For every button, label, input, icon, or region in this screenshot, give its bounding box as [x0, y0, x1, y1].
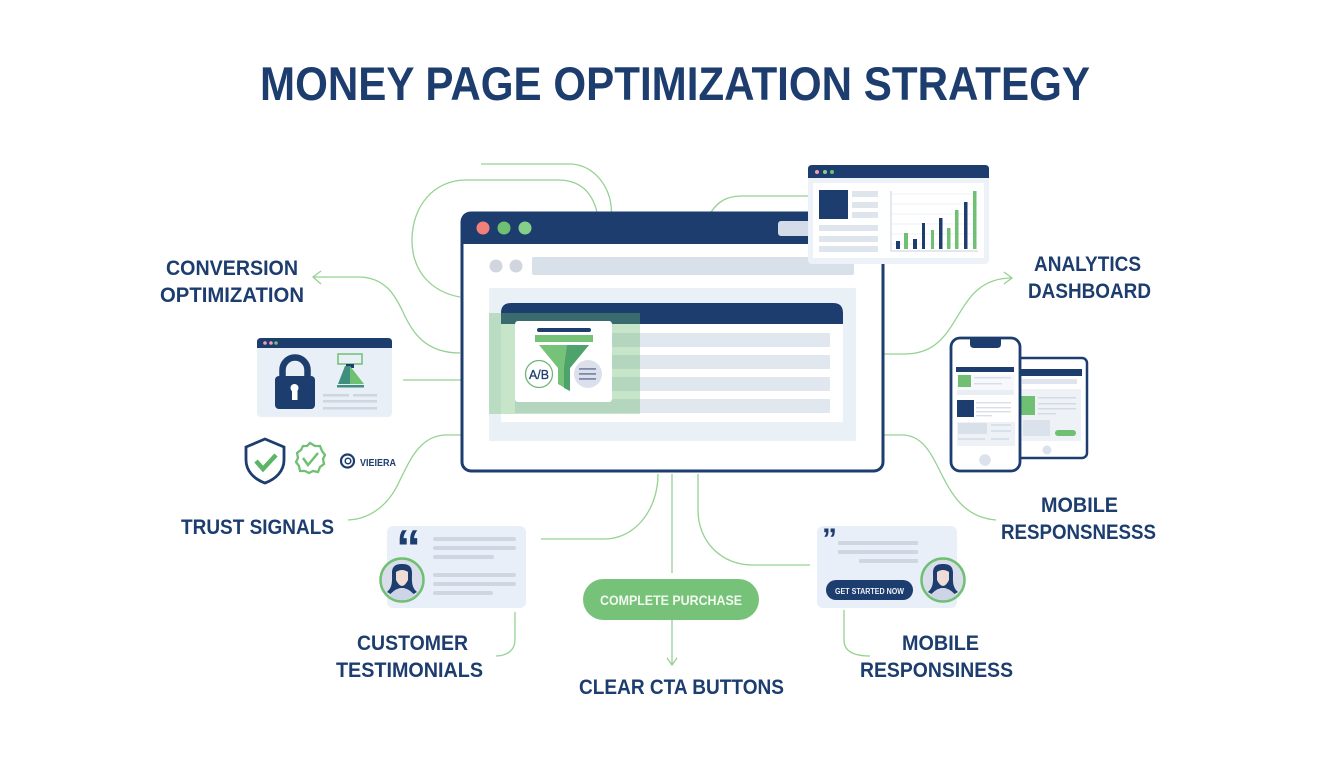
label: analytics dashboard: DASHBOARD — [1028, 280, 1151, 303]
security card — [257, 338, 392, 417]
label: customer testimonials: TESTIMONIALS — [336, 659, 483, 682]
get started card — [817, 523, 964, 608]
icon: shield check — [246, 439, 284, 483]
avatar — [922, 558, 964, 602]
connector lines — [313, 164, 1012, 665]
label: conversion optimization — [160, 257, 304, 307]
window dots — [476, 222, 532, 234]
get started button: GET STARTED NOW — [835, 587, 904, 596]
logo: Vieiera: VIEIERA — [360, 458, 396, 469]
testimonial card — [380, 520, 526, 608]
text lines — [838, 541, 918, 563]
title: MONEY PAGE OPTIMIZATION STRATEGY — [260, 57, 1090, 110]
A/B badge: A/B — [529, 367, 549, 382]
funnel card — [515, 321, 612, 402]
text lines — [433, 537, 516, 595]
icon: funnel pedestal — [337, 354, 364, 388]
quote mark: ” — [822, 523, 837, 556]
label: mobile responsiveness right: RESPONSNESSS — [1001, 521, 1156, 544]
funnel icon — [535, 328, 593, 391]
inner page — [501, 303, 843, 422]
label: mobile responsiveness bottom: MOBILE — [902, 632, 979, 655]
green highlight overlay — [489, 313, 640, 414]
analytics dashboard card — [808, 165, 989, 264]
label: mobile responsiveness bottom — [860, 632, 1013, 682]
text lines — [323, 394, 377, 410]
avatar — [380, 558, 424, 602]
icon: padlock — [275, 357, 315, 409]
address pill — [778, 221, 818, 236]
logo: Vieiera — [341, 454, 396, 469]
phone mockup — [951, 338, 1020, 471]
label: mobile responsiveness bottom: RESPONSINESS — [860, 659, 1013, 682]
label: mobile responsiveness right — [1001, 494, 1156, 544]
label: customer testimonials: CUSTOMER — [357, 632, 468, 655]
toolbar — [490, 257, 854, 275]
main browser window — [461, 212, 884, 471]
sidebar blocks — [819, 190, 878, 252]
label: trust signals: TRUST SIGNALS — [181, 516, 334, 539]
browser title bar — [461, 212, 884, 244]
CTA button: complete purchase — [583, 579, 759, 620]
label: analytics dashboard: ANALYTICS — [1034, 253, 1141, 276]
label: customer testimonials — [336, 632, 483, 682]
tablet mockup — [1015, 358, 1087, 458]
label: conversion optimization: OPTIMIZATION — [160, 284, 304, 307]
CTA button: complete purchase: COMPLETE PURCHASE — [600, 592, 742, 608]
get started button — [826, 580, 913, 600]
menu badge — [574, 360, 602, 388]
content panel — [489, 288, 856, 441]
label: mobile responsiveness right: MOBILE — [1041, 494, 1118, 517]
icon: verified badge — [296, 443, 325, 473]
label: clear CTA buttons: CLEAR CTA BUTTONS — [579, 676, 784, 699]
bar chart — [891, 191, 978, 251]
label: analytics dashboard — [1028, 253, 1151, 303]
quote mark: “ — [396, 520, 421, 576]
label: conversion optimization: CONVERSION — [166, 257, 298, 280]
